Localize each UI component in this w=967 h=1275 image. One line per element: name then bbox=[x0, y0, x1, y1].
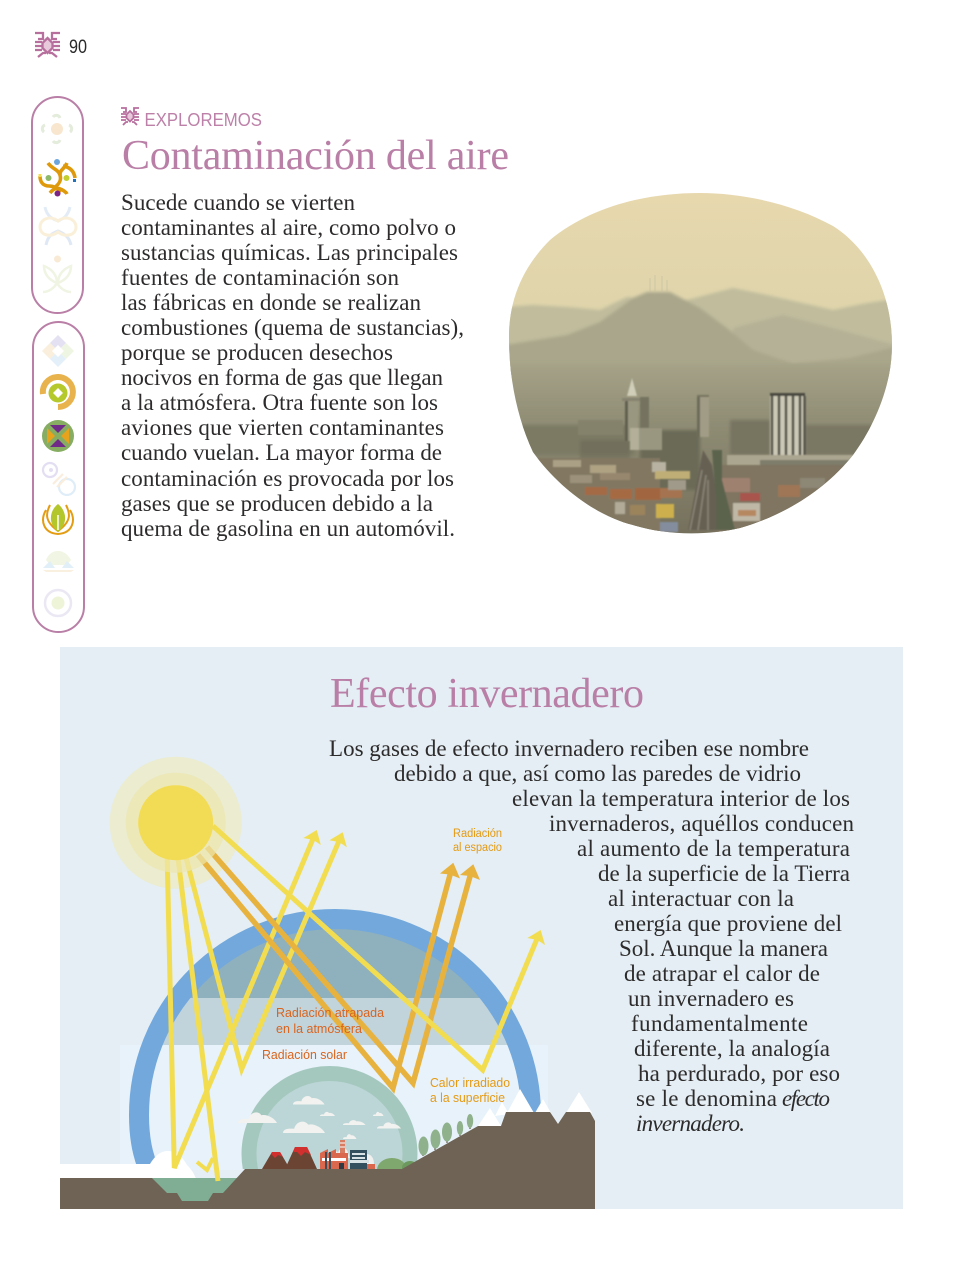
icon: leaf in orange flame bbox=[43, 504, 73, 534]
icon: active colored symbol bbox=[38, 159, 76, 196]
atmosphere blue arch bbox=[139, 919, 533, 1190]
panel: sidebar lower pill bbox=[33, 322, 84, 632]
snow and iceberg bbox=[60, 1151, 196, 1179]
volcanoes bbox=[262, 1147, 317, 1169]
atmosphere layers bbox=[162, 929, 508, 1045]
icon: faded diamond bbox=[42, 335, 74, 367]
diagram: greenhouse effect bbox=[60, 757, 595, 1242]
text block: air pollution: nocivos en forma de gas que llegan bbox=[121, 365, 444, 390]
text block: greenhouse explanation: Sol. Aunque la manera bbox=[619, 936, 828, 961]
label: radiation to space bbox=[453, 828, 502, 854]
reflected ray bbox=[213, 826, 538, 1070]
text block: air pollution: quema de gasolina en un automóvil. bbox=[121, 516, 455, 541]
page number: 90 bbox=[69, 37, 87, 58]
trees bbox=[418, 1114, 473, 1156]
bushes bbox=[377, 1158, 418, 1182]
text block: greenhouse explanation: al aumento de la temperatura bbox=[577, 836, 850, 861]
panel: sidebar upper pill bbox=[32, 97, 83, 313]
label: trapped radiation bbox=[276, 1005, 385, 1036]
title: Contaminación del aire bbox=[122, 133, 509, 179]
mountain snowcaps bbox=[478, 1089, 592, 1126]
text block: greenhouse explanation bbox=[329, 736, 854, 1136]
text block: greenhouse explanation: efecto bbox=[782, 1086, 830, 1111]
label: radiation to space: Radiación bbox=[453, 828, 502, 840]
label: heat radiated: a la superficie bbox=[430, 1090, 505, 1105]
text block: air pollution: contaminación es provocada por los bbox=[121, 466, 454, 491]
text block: greenhouse explanation: diferente, la analogía bbox=[634, 1036, 830, 1061]
sun bbox=[126, 773, 226, 873]
text block: air pollution: sustancias químicas. Las principales bbox=[121, 240, 458, 265]
text block: greenhouse explanation: debido a que, así como las paredes de vidrio bbox=[394, 761, 801, 786]
icon: faded sprout bbox=[43, 256, 71, 292]
text block: air pollution: combustiones (quema de sustancias), bbox=[121, 315, 464, 340]
arrowheads bbox=[304, 830, 545, 945]
icon: small emblem bbox=[121, 108, 139, 125]
heading: Efecto invernadero bbox=[330, 671, 644, 717]
ground terrain bbox=[60, 1112, 595, 1209]
text block: greenhouse explanation: se le denomina bbox=[636, 1086, 777, 1111]
text block: air pollution: a la atmósfera. Otra fuente son los bbox=[121, 390, 438, 415]
label: heat radiated bbox=[430, 1075, 510, 1105]
text block: air pollution: las fábricas en donde se realizan bbox=[121, 290, 422, 315]
text block: greenhouse explanation: de la superficie de la Tierra bbox=[598, 861, 850, 886]
text block: air pollution: gases que se producen debido a la bbox=[121, 491, 433, 516]
city blocks and road bbox=[535, 450, 845, 535]
icon: faded circle burst bbox=[45, 590, 71, 616]
clouds bbox=[238, 1096, 401, 1139]
text block: air pollution: contaminantes al aire, como polvo o bbox=[121, 215, 456, 240]
page number and emblem bbox=[35, 33, 87, 58]
text block: greenhouse explanation: energía que proviene del bbox=[614, 911, 842, 936]
text block: greenhouse explanation: invernadero. bbox=[636, 1111, 745, 1136]
text block: greenhouse explanation: fundamentalmente bbox=[631, 1011, 808, 1036]
icon: faded percent circles bbox=[43, 463, 75, 495]
label: heat radiated: Calor irradiado bbox=[430, 1075, 510, 1090]
text block: air pollution: aviones que vierten contaminantes bbox=[121, 415, 444, 440]
text block: greenhouse explanation: ha perdurado, por eso bbox=[638, 1061, 840, 1086]
icon: green circle with X bbox=[42, 420, 74, 452]
small greenhouse dome bbox=[242, 1066, 418, 1169]
text block: greenhouse explanation: un invernadero es bbox=[628, 986, 794, 1011]
dark trees and hazy blocks bbox=[515, 420, 885, 490]
factory bbox=[320, 1140, 375, 1169]
text block: greenhouse explanation: elevan la temperatura interior de los bbox=[512, 786, 850, 811]
label: radiation to space: al espacio bbox=[453, 842, 502, 854]
text block: air pollution: cuando vuelan. La mayor forma de bbox=[121, 440, 442, 465]
text block: air pollution: fuentes de contaminación son bbox=[121, 265, 400, 290]
icon: page emblem bbox=[35, 33, 60, 57]
label: trapped radiation: Radiación atrapada bbox=[276, 1005, 385, 1020]
icon: faded interlaced arcs bbox=[40, 207, 76, 245]
lake bbox=[152, 1178, 238, 1205]
text block: greenhouse explanation: Los gases de efecto invernadero reciben ese nombre bbox=[329, 736, 809, 761]
text block: air pollution: porque se producen desechos bbox=[121, 340, 393, 365]
icon: faded flower bbox=[42, 115, 72, 143]
text block: greenhouse explanation: de atrapar el calor de bbox=[624, 961, 820, 986]
text block: air pollution: Sucede cuando se vierten bbox=[121, 190, 356, 215]
text block: greenhouse explanation: invernaderos, aquéllos conducen bbox=[549, 811, 854, 836]
solar rays bbox=[167, 836, 471, 1181]
sun halo bbox=[110, 757, 242, 889]
text block: air pollution bbox=[121, 190, 464, 541]
icon: orange ring with green diamond bbox=[43, 377, 73, 407]
photo: smog over the city bbox=[500, 185, 900, 539]
towers bbox=[578, 378, 860, 468]
label: solar radiation: Radiación solar bbox=[262, 1047, 348, 1062]
text block: greenhouse explanation: al interactuar con la bbox=[608, 886, 794, 911]
label: trapped radiation: en la atmósfera bbox=[276, 1021, 363, 1036]
icon: faded shell bbox=[43, 551, 74, 572]
section label: Exploremos: EXPLOREMOS bbox=[144, 110, 262, 130]
panel: greenhouse effect bbox=[60, 647, 903, 1242]
